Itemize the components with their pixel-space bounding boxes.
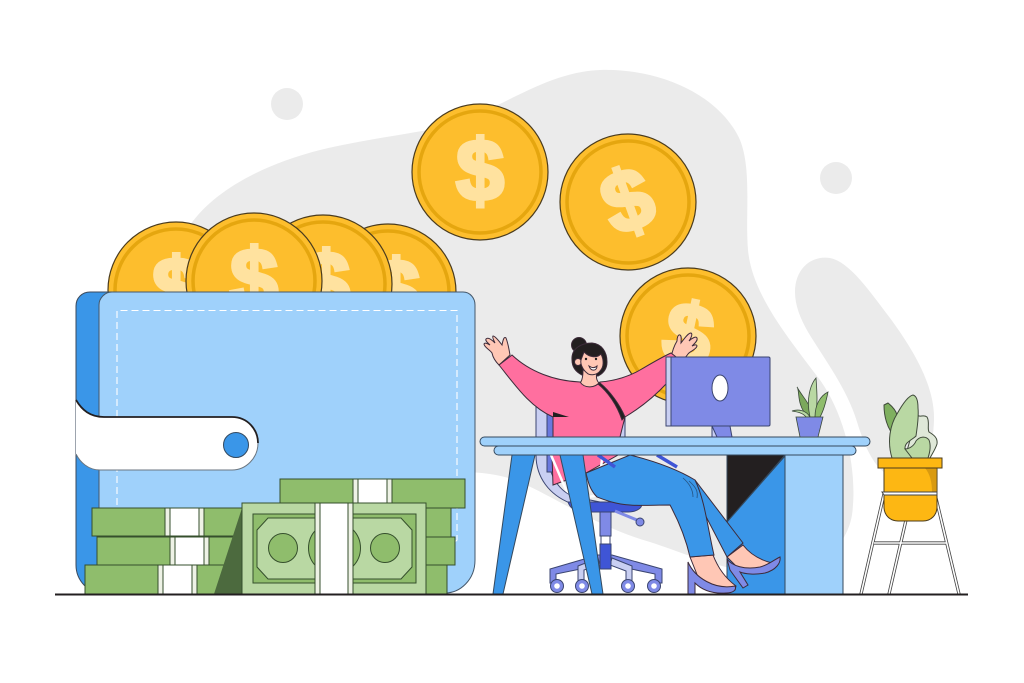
desk cabinet light panel [785, 455, 843, 594]
chair arm lever [615, 511, 637, 520]
coin: top centre: $ [456, 123, 504, 219]
desk plant [792, 378, 828, 437]
plant pot body [884, 467, 937, 521]
chair back [536, 403, 600, 503]
money stack right [280, 479, 465, 594]
wallet button [224, 432, 248, 458]
plant left leaf [884, 403, 897, 433]
coin: wallet centre right [254, 215, 392, 353]
plant stand [861, 494, 959, 594]
ear [574, 358, 582, 366]
floor plant [861, 395, 959, 594]
coin: top right: $ [589, 148, 667, 254]
hair bun [572, 338, 586, 352]
coin: wallet centre: $ [230, 232, 278, 328]
hair [572, 343, 607, 376]
neck [580, 370, 599, 387]
coin: wallet left: $ [152, 241, 200, 337]
desk lower top [494, 446, 856, 455]
monitor stand [712, 426, 732, 437]
chair wheels [550, 580, 660, 592]
desk cabinet [727, 455, 843, 594]
plant green lobe [905, 437, 930, 458]
person [484, 333, 780, 594]
desk cabinet blue panel [727, 456, 785, 594]
bag strap [598, 383, 625, 420]
mouth [589, 366, 597, 370]
front banknote [242, 503, 426, 594]
chair seat [568, 502, 642, 512]
back leg [695, 480, 743, 557]
ground line [55, 594, 968, 596]
wallet [76, 292, 475, 594]
desk [480, 437, 870, 594]
desk right leg [560, 455, 603, 594]
chair arm bars [598, 455, 677, 467]
wallet stitching [117, 310, 457, 552]
coin: wallet centre right: $ [302, 235, 350, 331]
coin: top centre [412, 104, 548, 240]
monitor body [666, 357, 770, 426]
eyes [585, 358, 597, 360]
background blobs [190, 70, 934, 573]
chair column [600, 512, 611, 536]
wallet strap [76, 400, 258, 470]
stand ring [882, 492, 937, 495]
chair armrest [551, 455, 602, 497]
right hand [671, 333, 697, 361]
monitor [666, 357, 770, 437]
pot rim [878, 458, 942, 468]
pot shadow [925, 468, 936, 492]
coin: wallet right: $ [372, 243, 420, 339]
monitor logo [712, 375, 728, 401]
face [581, 352, 603, 375]
coin: behind person: $ [655, 283, 722, 387]
pink sweater [499, 353, 680, 437]
back foot [727, 545, 772, 570]
money stack left [85, 508, 247, 594]
desk left leg [493, 455, 535, 594]
trousers [586, 455, 714, 557]
desk plant pot [796, 417, 823, 437]
coin: wallet left [108, 222, 244, 358]
left hand [484, 336, 510, 365]
desk plant leaves [797, 387, 812, 417]
bill shadow [214, 508, 242, 594]
under-arm shadow [553, 412, 569, 417]
plant right pale leaf [905, 415, 937, 458]
desk cabinet dark panel [727, 455, 785, 522]
coin: behind person [620, 268, 756, 404]
front shoe [688, 562, 736, 594]
coin: top right [560, 134, 696, 270]
office chair [536, 403, 662, 592]
wallet spine [76, 292, 120, 594]
desk upper top [480, 437, 870, 446]
trouser folds [683, 478, 697, 498]
wallet front [99, 292, 475, 593]
banknote band [315, 503, 353, 594]
coin: wallet right [320, 224, 456, 360]
pink sweater lower [552, 455, 618, 485]
front foot [690, 555, 736, 591]
plant main leaf [890, 395, 918, 458]
coin: wallet centre [186, 213, 322, 349]
chair base [550, 555, 662, 583]
back shoe [727, 557, 780, 588]
